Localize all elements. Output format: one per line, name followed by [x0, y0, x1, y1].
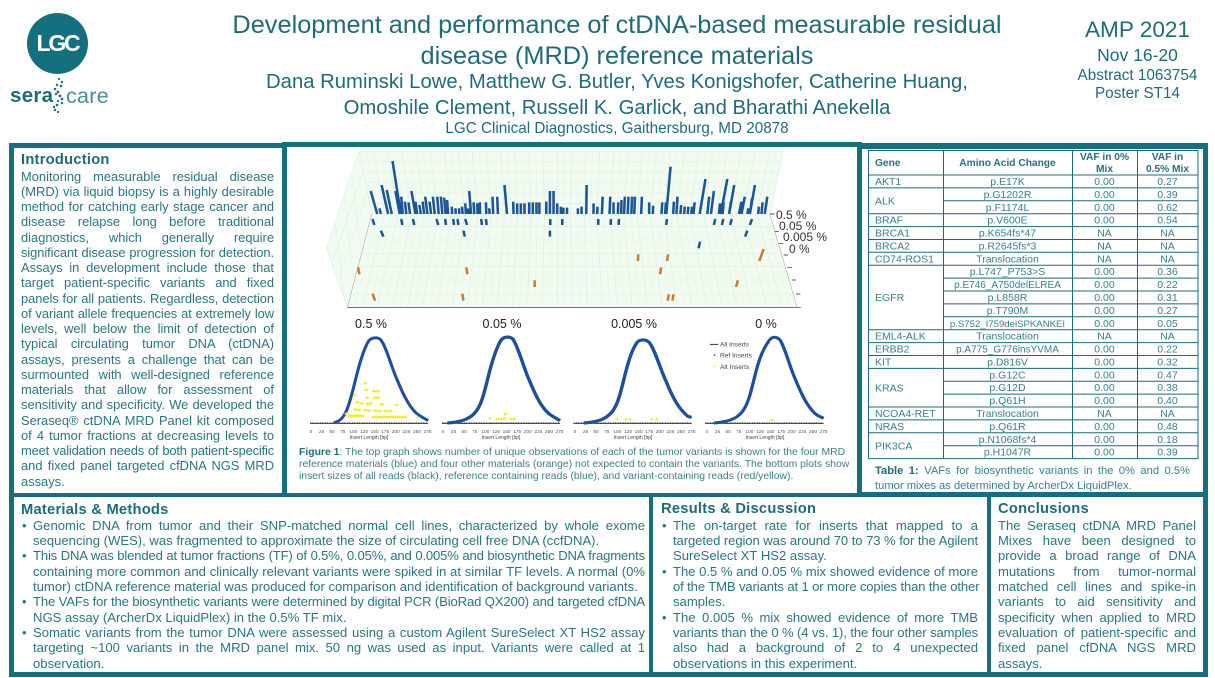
- axis tick labels: 25: [715, 429, 721, 435]
- text: results list: SureSelect XT HS2 assay.: [673, 548, 827, 563]
- axis tick labels: 225: [666, 429, 675, 435]
- table: VAFs for biosynthetic variants: 0.00: [1094, 447, 1115, 459]
- panel: materials and methods: •: [22, 625, 27, 640]
- axis tick labels: 100: [349, 429, 358, 435]
- conference info: [1078, 17, 1197, 102]
- table: VAFs for biosynthetic variants: 0.47: [1157, 369, 1178, 381]
- text: introduction body: surmounted with well-designed reference: [21, 367, 274, 382]
- table: VAFs for biosynthetic variants: NA: [1160, 408, 1175, 420]
- plot titles: [355, 317, 777, 331]
- axis tick labels: 100: [481, 429, 490, 435]
- table: VAFs for biosynthetic variants: 0.00: [1094, 421, 1115, 433]
- axis tick labels: 50: [462, 429, 467, 435]
- conference name: AMP 2021: [1085, 17, 1190, 42]
- chart series labels: [776, 208, 827, 256]
- table: VAFs for biosynthetic variants: PIK3CA: [875, 440, 912, 452]
- table: VAFs for biosynthetic variants: Translocation: [976, 408, 1039, 420]
- table: VAFs for biosynthetic variants: p.E746_A750delELREA: [954, 280, 1061, 291]
- axis tick labels: 225: [798, 429, 807, 435]
- panel: results and discussion: •: [662, 564, 667, 579]
- figure caption: [299, 447, 850, 482]
- chart series labels: 0.5 %: [776, 208, 807, 222]
- table: VAFs for biosynthetic variants: 0.48: [1157, 421, 1178, 433]
- table: VAFs for biosynthetic variants: 0.00: [1094, 318, 1115, 330]
- table: VAFs for biosynthetic variants: 0.00: [1094, 279, 1115, 291]
- text: introduction body: target patient-specific variants and fixed: [21, 275, 274, 290]
- axis tick labels: 200: [656, 429, 664, 435]
- table: VAFs for biosynthetic variants: p.Q61R: [989, 421, 1026, 433]
- table: VAFs for biosynthetic variants: 0.32: [1157, 356, 1178, 368]
- text: methods list: observation.: [33, 656, 104, 671]
- table: VAFs for biosynthetic variants: Mix: [1096, 164, 1113, 175]
- table: VAFs for biosynthetic variants: NA: [1097, 253, 1112, 265]
- seracare wordmark: care: [66, 84, 109, 108]
- axis tick labels: 0: [574, 429, 577, 435]
- table: VAFs for biosynthetic variants: 0.00: [1094, 434, 1115, 446]
- table: VAFs for biosynthetic variants: p.T790M: [987, 305, 1028, 317]
- authors: [266, 71, 968, 118]
- axis tick labels: 250: [545, 429, 553, 435]
- table: VAFs for biosynthetic variants: p.V600E: [987, 215, 1028, 227]
- table: VAFs for biosynthetic variants: p.Q61H: [989, 395, 1026, 407]
- axis titles: Insert Length [bp]: [350, 435, 389, 441]
- axis tick labels: 275: [424, 429, 432, 435]
- figure caption: insert sizes of all reads (black), reference containing reads (blue), and variant-containing reads (red/yellow).: [299, 471, 793, 482]
- table: VAFs for biosynthetic variants: NRAS: [875, 421, 904, 433]
- legend text: Alt Inserts: [720, 364, 750, 371]
- table: VAFs for biosynthetic variants: 0.00: [1094, 382, 1115, 394]
- axis tick labels: 75: [340, 429, 346, 435]
- plot titles: 0.5 %: [355, 317, 387, 331]
- text: results list: The 0.5 % and 0.05 % mix showed evidence of more: [673, 564, 978, 579]
- blue bars: 0.05 %, 0.005 % and 0 % series: [373, 219, 752, 248]
- axis titles: [350, 435, 785, 441]
- plot: 0.5 %: [310, 338, 824, 423]
- table: VAFs for biosynthetic variants: 0.00: [1094, 356, 1115, 368]
- authors: Omoshile Clement, Russell K. Garlick, and Bharathi Anekella: [344, 96, 890, 118]
- chart series labels: 0.05 %: [779, 219, 817, 233]
- text: methods list: targeting ~100 variants in the MRD panel mix. 50 ng was used as input. Variants were called at 1: [33, 640, 645, 655]
- axis tick labels: 25: [451, 429, 457, 435]
- plot titles: 0 %: [755, 317, 777, 331]
- table: VAFs for biosynthetic variants: 0.40: [1157, 395, 1178, 407]
- axis tick labels: 175: [645, 429, 654, 435]
- table: VAFs for biosynthetic variants: CD74-ROS1: [875, 253, 934, 265]
- legend text: All Inserts: [720, 342, 750, 348]
- table: VAFs for biosynthetic variants: NA: [1097, 408, 1112, 420]
- text: introduction body: Seraseq® ctDNA MRD Panel kit composed: [21, 412, 274, 428]
- text: conclusions body: variants to aid sensitivity and: [998, 594, 1196, 609]
- axis tick labels: 225: [534, 429, 543, 435]
- plot: 0 %: [714, 337, 824, 423]
- title: [232, 11, 1002, 70]
- logo: LGC SeraCare: [10, 13, 109, 114]
- insert length distribution plots: [310, 336, 824, 425]
- table: VAFs for biosynthetic variants: NCOA4-RET: [875, 408, 936, 420]
- icon: LGC circle: [27, 13, 88, 74]
- plot labels and axes text: [310, 317, 828, 441]
- axis tick labels: 125: [360, 429, 368, 435]
- text: introduction body: assays.: [21, 474, 65, 488]
- table: VAFs for biosynthetic variants: 0.00: [1094, 266, 1115, 278]
- axis tick labels: 100: [745, 429, 754, 435]
- panel: results and discussion: •: [662, 518, 667, 532]
- heading: introduction: Introduction: [21, 152, 110, 168]
- text: introduction body: materials that allow for assessment of: [21, 382, 274, 397]
- text: methods list: [22, 518, 645, 671]
- table: VAFs for biosynthetic variants: BRCA1: [875, 228, 910, 240]
- table: VAFs for biosynthetic variants: 0.00: [1094, 305, 1115, 317]
- text: results list: [662, 518, 980, 671]
- table: VAFs for biosynthetic variants: 0.39: [1157, 189, 1178, 201]
- table: VAFs for biosynthetic variants: NA: [1097, 331, 1112, 343]
- title: Development and performance of ctDNA-based measurable residual: [232, 11, 1002, 39]
- axis tick labels: 225: [402, 429, 411, 435]
- axis tick labels: 50: [594, 429, 599, 435]
- heading: results and discussion: Results & Discussion: [661, 501, 816, 517]
- table: VAFs for biosynthetic variants: VAF in 0%: [1080, 152, 1129, 163]
- text: methods list: sequencing (WES), was fragmented to approximate the size of circulating cell free DNA (ccfDNA).: [33, 533, 599, 548]
- table: VAFs for biosynthetic variants: Amino Acid Change: [959, 158, 1056, 169]
- text: conclusions body: mutations from tumor-normal: [998, 564, 1196, 579]
- figure caption: reference materials (blue) and four other materials (orange) not expected to contain the variants. The bottom plots show: [299, 459, 849, 470]
- table: VAFs for biosynthetic variants: NA: [1160, 228, 1175, 240]
- text: results list: targeted region was around 70 to 73 % for the Agilent: [673, 533, 978, 548]
- table: VAFs for biosynthetic variants: 0.00: [1094, 215, 1115, 227]
- axis tick labels: 0: [706, 429, 709, 435]
- table: VAFs for biosynthetic variants: 0.5% Mix: [1146, 164, 1189, 175]
- axis tick labels: 200: [392, 429, 400, 435]
- text: methods list: Somatic variants from the tumor DNA were assessed using a custom Agilent SureSelect XT HS2 assay: [33, 625, 645, 640]
- table: VAFs for biosynthetic variants: p.N1068fs*4: [979, 434, 1037, 446]
- axis tick labels: 0: [442, 429, 445, 435]
- table: VAFs for biosynthetic variants: p.S752_I759delSPKANKEI: [950, 319, 1065, 330]
- table: VAFs for biosynthetic variants: 0.05: [1157, 318, 1178, 330]
- table: VAFs for biosynthetic variants: 0.00: [1094, 395, 1115, 407]
- table caption: Table 1: VAFs for biosynthetic variants in the 0% and 0.5%: [875, 465, 1190, 477]
- text: results list: The on-target rate for inserts that mapped to a: [673, 518, 978, 532]
- text: introduction body: Assays in development include those that: [21, 260, 274, 275]
- table: VAFs for biosynthetic variants: AKT1: [875, 176, 901, 188]
- axis tick labels: 250: [413, 429, 421, 435]
- table: VAFs for biosynthetic variants: p.K654fs*47: [979, 228, 1036, 240]
- authors: Dana Ruminski Lowe, Matthew G. Butler, Yves Konigshofer, Catherine Huang,: [266, 71, 968, 93]
- axis tick labels: 150: [503, 429, 511, 435]
- text: methods list: Genomic DNA from tumor and their SNP-matched normal cell lines, characterized by whole exome: [33, 518, 645, 532]
- text: results list: samples.: [673, 594, 725, 609]
- panel: materials and methods: •: [22, 548, 26, 563]
- table: VAFs for biosynthetic variants: 0.00: [1094, 176, 1115, 188]
- axis tick labels: 125: [624, 429, 632, 435]
- text: results list: of the TMB variants at 1 or more copies than the other: [673, 579, 979, 594]
- table: VAFs for biosynthetic variants: 0.18: [1157, 434, 1178, 446]
- table: VAFs for biosynthetic variants: 0.00: [1094, 369, 1115, 381]
- axis tick labels: 75: [604, 429, 610, 435]
- text: introduction body: and fixed panel targeted cfDNA NGS MRD: [21, 458, 274, 473]
- text: methods list: NGS assay (ArcherDx LiquidPlex) in the 0.5% TF mix.: [33, 610, 346, 625]
- axis tick labels: 275: [688, 429, 696, 435]
- figure frame top strip: [282, 142, 862, 144]
- text: conclusions body: fixed panel cfDNA NGS MRD: [998, 640, 1196, 655]
- table: VAFs for biosynthetic variants: NA: [1160, 331, 1175, 343]
- axis tick labels: 50: [726, 429, 731, 435]
- table: VAFs for biosynthetic variants: NA: [1097, 240, 1112, 252]
- panel: table 1: [862, 149, 1203, 492]
- table caption: tumor mixes as determined by ArcherDx LiquidPlex.: [875, 480, 1132, 492]
- table: VAFs for biosynthetic variants: p.R2645fs*3: [979, 240, 1037, 252]
- axis tick labels: 125: [492, 429, 500, 435]
- axis tick labels: 150: [635, 429, 643, 435]
- axis tick labels: 150: [371, 429, 379, 435]
- table: VAFs for biosynthetic variants: NA: [1160, 253, 1175, 265]
- table: VAFs for biosynthetic variants: EML4-ALK: [875, 331, 926, 343]
- table: VAFs for biosynthetic variants: 0.39: [1157, 447, 1178, 459]
- table: VAFs for biosynthetic variants: p.A775_G776insYVMA: [956, 345, 1059, 356]
- table: VAFs for biosynthetic variants: EGFR: [875, 292, 905, 304]
- text: introduction body: of 4 tumor fractions at decreasing levels to: [21, 428, 274, 443]
- text: results list: also had a background of 2 to 4 unexpected: [673, 640, 978, 655]
- text: results list: observations in this experiment.: [673, 656, 857, 671]
- panel: introduction: [14, 148, 282, 493]
- axis tick labels: 200: [524, 429, 532, 435]
- table: VAFs for biosynthetic variants: 0.22: [1157, 344, 1178, 356]
- text: introduction body: panels for all patients. Regardless, detection: [21, 290, 274, 306]
- table: VAFs for biosynthetic variants: 0.27: [1157, 305, 1178, 317]
- table: VAFs for biosynthetic variants: 0.36: [1157, 266, 1178, 278]
- text: introduction body: meet validation needs of both patient-specific: [21, 443, 274, 458]
- panel: results and discussion: [653, 497, 987, 672]
- table: VAFs for biosynthetic variants: 0.54: [1157, 215, 1178, 227]
- text: introduction body: Monitoring measurable residual disease: [21, 168, 274, 184]
- text: methods list: The VAFs for the biosynthetic variants were determined by digital PCR (BioRad QX200) and targeted cfDNA: [33, 594, 645, 609]
- text: introduction body: typical circulating tumor DNA (ctDNA): [21, 336, 274, 351]
- table: VAFs for biosynthetic variants: 0.38: [1157, 382, 1178, 394]
- table: VAFs for biosynthetic variants: p.G12C: [989, 369, 1026, 381]
- blue bars: 0.5 % series: [371, 161, 767, 214]
- table: VAFs for biosynthetic variants: ALK: [875, 195, 895, 207]
- text: methods list: containing more common and clinically relevant variants were spiked in at similar TF levels. A normal (0%: [33, 564, 645, 579]
- table: VAFs for biosynthetic variants: 0.27: [1157, 176, 1178, 188]
- title: disease (MRD) reference materials: [421, 42, 813, 70]
- plot titles: 0.05 %: [483, 317, 521, 331]
- table: VAFs for biosynthetic variants: p.L858R: [988, 292, 1028, 304]
- chart series labels: 0.005 %: [783, 230, 827, 244]
- axis tick labels: 175: [381, 429, 390, 435]
- panel: materials and methods: •: [22, 518, 27, 532]
- table: VAFs for biosynthetic variants: p.E17K: [990, 176, 1025, 188]
- table: VAFs for biosynthetic variants: BRCA2: [875, 240, 910, 252]
- text: introduction body: significant disease progression for detection.: [21, 245, 274, 260]
- orange bars: other materials: [358, 249, 764, 301]
- text: conclusions body: evaluation of patient-specific and: [998, 625, 1196, 640]
- abstract number: Abstract 1063754: [1078, 67, 1197, 84]
- axis tick labels: 75: [472, 429, 478, 435]
- panel: results and discussion: •: [662, 610, 667, 625]
- legend markers: [710, 344, 718, 367]
- seracare wordmark: [10, 84, 109, 108]
- text: conclusions body: [998, 518, 1196, 671]
- teal panel frame: [9, 143, 1208, 677]
- text: conclusions body: Mixes have been designed to: [998, 533, 1196, 548]
- chart series labels: 0 %: [789, 242, 810, 256]
- axis titles: Insert Length [bp]: [614, 435, 653, 441]
- table: VAFs for biosynthetic variants: 0.22: [1157, 279, 1178, 291]
- table: VAFs for biosynthetic variants: p.H1047R: [984, 447, 1032, 459]
- panel: figure 1: [287, 147, 857, 493]
- text: introduction body: sensitivity and specificity. We developed the: [21, 397, 274, 412]
- heading: conclusions: Conclusions: [998, 501, 1089, 517]
- text: introduction body: assays, presents a challenge that can be: [21, 352, 274, 366]
- icon: helix dots: [52, 78, 64, 114]
- table: VAFs for biosynthetic variants: 0.00: [1094, 344, 1115, 356]
- text: introduction body: (MRD) via liquid biopsy is a highly desirable: [21, 184, 274, 199]
- text: conclusions body: assays.: [998, 656, 1042, 671]
- text: methods list: tumor) ctDNA reference material was produced for comparison and identification of background variants.: [33, 579, 638, 594]
- axis tick labels: 250: [809, 429, 817, 435]
- axis tick labels: 50: [330, 429, 335, 435]
- text: introduction body: levels, well below the limit of detection of: [21, 321, 274, 336]
- axis tick labels: [310, 429, 828, 435]
- axis tick labels: 175: [513, 429, 522, 435]
- axis tick labels: 275: [556, 429, 564, 435]
- table: VAFs for biosynthetic variants: NA: [1097, 228, 1112, 240]
- table: VAFs for biosynthetic variants: ERBB2: [875, 344, 910, 356]
- poster number: Poster ST14: [1095, 85, 1180, 102]
- table: VAFs for biosynthetic variants: p.F1174L: [986, 202, 1029, 214]
- axis tick labels: 75: [736, 429, 742, 435]
- table: VAFs for biosynthetic variants: 0.31: [1157, 292, 1178, 304]
- table: VAFs for biosynthetic variants: p.D816V: [987, 356, 1028, 368]
- axis tick labels: 275: [820, 429, 828, 435]
- table: VAFs for biosynthetic variants: VAF in: [1152, 152, 1183, 163]
- panel: conclusions: [991, 497, 1203, 672]
- table: VAFs for biosynthetic variants: Gene: [875, 158, 901, 169]
- axis tick labels: 150: [767, 429, 775, 435]
- axis titles: Insert Length [bp]: [482, 435, 521, 441]
- table: VAFs for biosynthetic variants: NA: [1160, 240, 1175, 252]
- text: conclusions body: specificity when applied to MRD: [998, 610, 1196, 625]
- text: results list: variants than the 0 % (4 vs. 1), the four other samples: [673, 625, 978, 640]
- table: VAFs for biosynthetic variants: Translocation: [976, 331, 1039, 343]
- text: conclusions body: matched cell lines and spike-in: [998, 579, 1196, 594]
- text: introduction body: diagnostics, which generally require: [21, 230, 274, 244]
- axis tick labels: 200: [788, 429, 796, 435]
- plot titles: 0.005 %: [611, 317, 657, 331]
- text: introduction body: [21, 168, 274, 488]
- table: VAFs for biosynthetic variants: 0.00: [1094, 189, 1115, 201]
- table: VAFs for biosynthetic variants: KIT: [875, 356, 892, 368]
- affiliation: LGC Clinical Diagnostics, Gaithersburg, MD 20878: [445, 120, 789, 137]
- table caption: [875, 465, 1190, 492]
- table: VAFs for biosynthetic variants: KRAS: [875, 382, 904, 394]
- axis tick labels: 0: [310, 429, 313, 435]
- text: introduction body: method for catching early stage cancer and: [21, 199, 274, 214]
- text: conclusions body: The Seraseq ctDNA MRD Panel: [998, 518, 1196, 532]
- text: introduction body: disease relapse long before traditional: [21, 214, 274, 229]
- conference dates: Nov 16-20: [1097, 45, 1178, 65]
- icon: LGC circle: LGC: [37, 30, 78, 56]
- heading: materials and methods: Materials & Methods: [21, 502, 169, 518]
- legend text: [720, 342, 753, 371]
- panel: materials and methods: [14, 497, 649, 672]
- axis tick labels: 175: [777, 429, 786, 435]
- axis tick labels: 25: [319, 429, 325, 435]
- table: VAFs for biosynthetic variants: p.G12D: [989, 382, 1026, 394]
- plot: 0.005 %: [584, 340, 692, 423]
- 3D bar chart of variant observations: [326, 150, 801, 308]
- text: introduction body: of variant allele frequencies at extremely low: [21, 306, 274, 321]
- text: conclusions body: provide a broad range of DNA: [998, 548, 1196, 563]
- axis titles: Insert Length [bp]: [746, 435, 785, 441]
- table: VAFs for biosynthetic variants: Translocation: [976, 253, 1039, 265]
- table: VAFs for biosynthetic variants: p.G1202R: [984, 189, 1032, 201]
- axis tick labels: 125: [756, 429, 764, 435]
- axis tick labels: 250: [677, 429, 685, 435]
- table: VAFs for biosynthetic variants: 0.00: [1094, 292, 1115, 304]
- legend text: Ref Inserts: [720, 352, 753, 360]
- axis tick labels: 25: [583, 429, 589, 435]
- table: VAFs for biosynthetic variants: BRAF: [875, 215, 903, 227]
- table: VAFs for biosynthetic variants: p.L747_P753>S: [970, 266, 1045, 278]
- text: results list: The 0.005 % mix showed evidence of more TMB: [673, 610, 978, 625]
- text: methods list: This DNA was blended at tumor fractions (TF) of 0.5%, 0.05%, and 0.005% and biosynthetic DNA fragments: [33, 548, 645, 563]
- axis tick labels: 100: [613, 429, 622, 435]
- table: VAFs for biosynthetic variants: [868, 150, 1198, 460]
- seracare wordmark: sera: [10, 84, 53, 107]
- table: VAFs for biosynthetic variants: 0.00: [1094, 202, 1115, 214]
- panel: materials and methods: •: [22, 594, 26, 609]
- table: VAFs for biosynthetic variants: 0.62: [1157, 202, 1178, 214]
- figure caption: Figure 1: The top graph shows number of unique observations of each of the tumor variants is shown for the four MRD: [299, 447, 845, 458]
- plot: 0.05 %: [447, 337, 560, 423]
